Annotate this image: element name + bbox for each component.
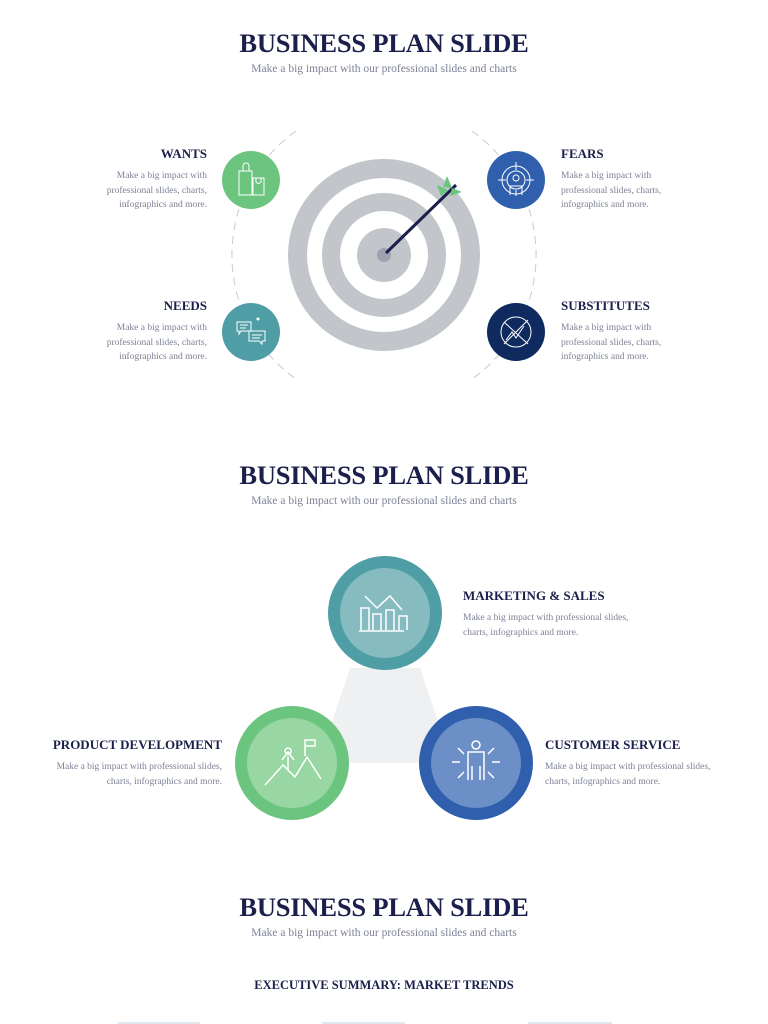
icon: fears [487,151,545,209]
target [298,168,470,342]
title 3: BUSINESS PLAN SLIDE [239,892,529,922]
icon: substitutes [487,303,545,361]
text: fears: professional slides, charts, [561,186,661,196]
text: wants: infographics and more. [119,200,207,210]
circle: marketing [328,556,442,670]
text: needs: infographics and more. [119,352,207,362]
arrow [386,176,462,253]
text: substitutes [561,298,661,362]
text: wants [106,146,207,210]
text: marketing & sales: MARKETING & SALES [463,588,605,603]
circle: customer service [419,706,533,820]
text: product development: Make a big impact with professional slides, [57,762,222,772]
text: customer service [545,737,710,786]
text: substitutes: SUBSTITUTES [561,298,650,313]
section heading: executive summary: EXECUTIVE SUMMARY: MARKET TRENDS [254,978,514,992]
circle: product development [235,706,349,820]
text: substitutes: professional slides, charts, [561,338,661,348]
icon: needs [222,303,280,361]
subtitle 2: Make a big impact with our professional slides and charts [251,495,517,507]
text: fears: Make a big impact with [561,171,651,181]
text: needs: professional slides, charts, [107,338,207,348]
dashed orbit [232,131,536,379]
title 2: BUSINESS PLAN SLIDE [239,460,529,490]
text: fears: infographics and more. [561,200,649,210]
text: marketing & sales [463,588,628,638]
text: substitutes: infographics and more. [561,352,649,362]
text: product development: PRODUCT DEVELOPMENT [53,737,222,752]
triangle background [318,668,452,763]
text: customer service: charts, infographics and more. [545,776,660,786]
text: fears: FEARS [561,146,604,161]
bottom partial cards [118,1022,612,1024]
subtitle 3: Make a big impact with our professional slides and charts [251,927,517,939]
text: needs: NEEDS [164,298,207,313]
text: wants: WANTS [161,146,207,161]
text: wants: professional slides, charts, [107,186,207,196]
text: customer service: Make a big impact with professional slides, [545,762,710,772]
text: marketing & sales: charts, infographics and more. [463,628,578,638]
icon: wants [222,151,280,209]
text: needs [106,298,207,362]
title 1: BUSINESS PLAN SLIDE [239,28,529,58]
text: wants: Make a big impact with [117,171,207,181]
text: customer service: CUSTOMER SERVICE [545,737,680,752]
text: product development: charts, infographics and more. [107,776,222,786]
text: substitutes: Make a big impact with [561,323,651,333]
text: product development [53,737,222,786]
subtitle 1: Make a big impact with our professional slides and charts [251,63,517,75]
text: needs: Make a big impact with [117,323,207,333]
text: marketing & sales: Make a big impact with professional slides, [463,613,628,623]
text: fears [561,146,661,210]
